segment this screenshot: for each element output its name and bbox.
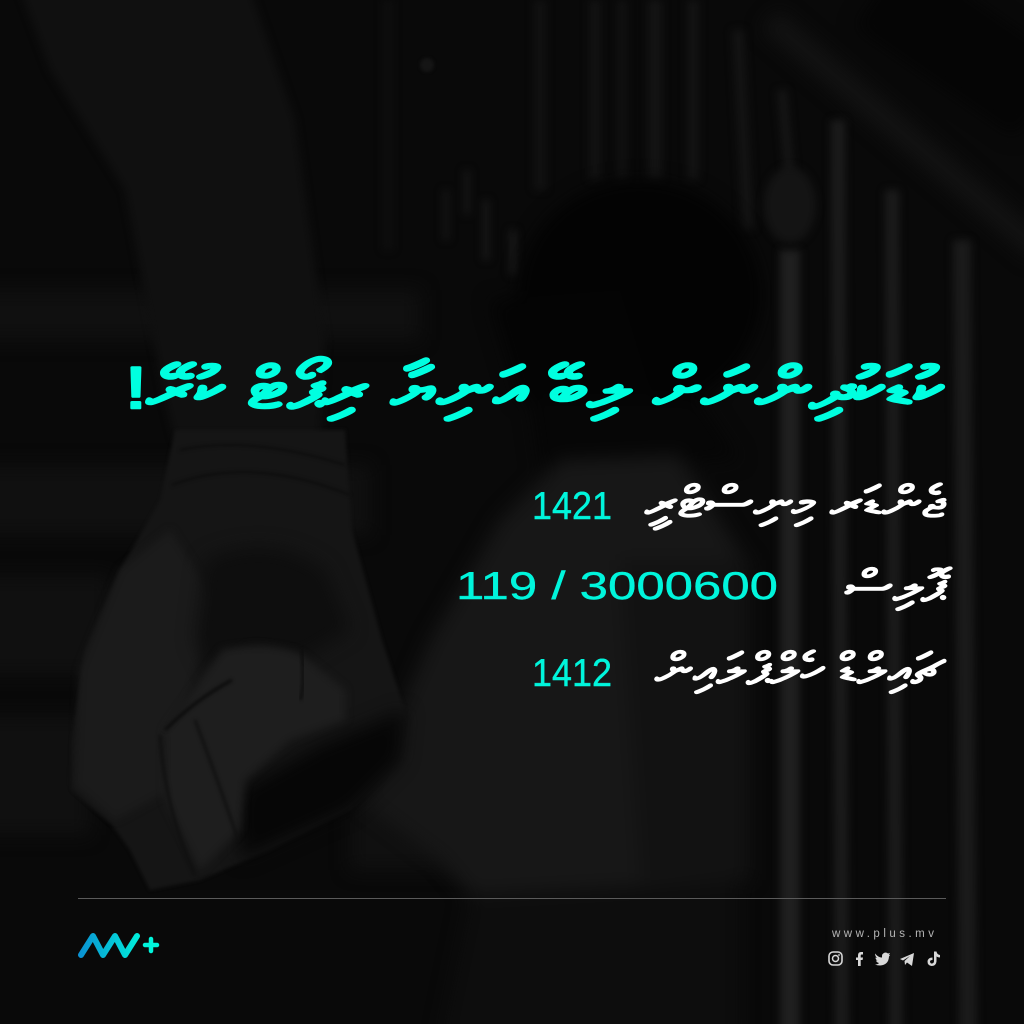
number: 1412: 1412 — [532, 652, 612, 695]
label: police: ޕޮލިސް — [845, 562, 953, 611]
arm — [20, 0, 325, 440]
icon: telegram — [900, 953, 914, 966]
label: child helpline: ޗައިލްޑް ހެލްޕްލައިން — [655, 645, 946, 694]
child figure — [360, 180, 762, 1024]
website url: www.plus.mv — [831, 928, 934, 940]
icon: twitter — [875, 952, 890, 966]
banister — [770, 0, 1024, 250]
icon: instagram — [829, 952, 842, 965]
icon: tiktok — [928, 952, 940, 966]
stair bands — [0, 290, 490, 870]
number: 119 / 3000600: 119 / 3000600 — [456, 565, 778, 608]
hotline row: child helpline — [532, 645, 946, 695]
hotline row: gender ministry — [532, 478, 946, 530]
headline: ކުޑަކުދިންނަށް ލިބޭ އަނިޔާ ރިޕޯޓް ކުރޭ! — [125, 356, 945, 421]
number: 1421: 1421 — [532, 485, 612, 528]
balusters — [388, 0, 968, 1024]
baluster knob — [764, 167, 816, 243]
icon: facebook — [856, 952, 863, 966]
social icons — [829, 952, 940, 966]
logo: MV+ — [81, 936, 157, 955]
fist photo — [72, 430, 405, 890]
hotline row: police — [456, 562, 953, 611]
footer divider — [78, 898, 946, 899]
label: gender ministry: ޖެންޑަރ މިނިސްޓްރީ — [645, 478, 946, 530]
